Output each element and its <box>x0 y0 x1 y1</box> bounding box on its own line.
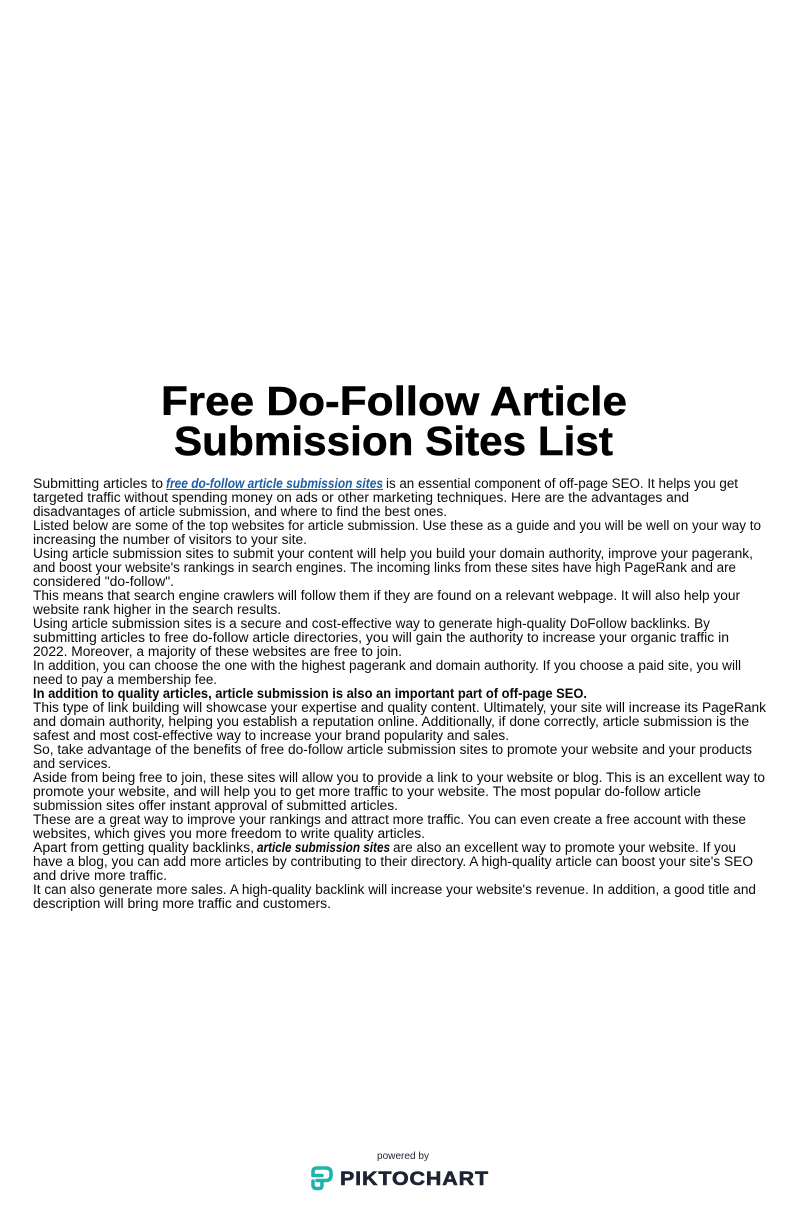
paragraph: more sales: It can also generate more sales. A high-quality backlink will increase your website's revenue. In addition, a good title and <box>33 882 756 898</box>
paragraph: introduction: targeted traffic without spending money on ads or other marketing techniques. Here are the advantages and <box>33 490 689 506</box>
paragraph: promoting your website: are also an excellent way to promote your website. If you <box>393 840 736 856</box>
paragraph: crawlers: website rank higher in the search results. <box>32 602 281 618</box>
body text <box>32 476 767 912</box>
paragraph: domain authority: Using article submission sites to submit your content will help you build your domain authority, improve your pagerank, <box>33 546 753 562</box>
icon: Piktochart logo <box>313 1168 331 1188</box>
paragraph: take advantage: So, take advantage of the benefits of free do-follow article submission sites to promote your website and your products <box>33 742 752 758</box>
paragraph: introduction <box>33 476 738 520</box>
paragraph: domain authority: and boost your website's rankings in search engines. The incoming links from these sites have high PageRank and are <box>33 560 736 576</box>
paragraph: introduction: disadvantages of article submission, and where to find the best ones. <box>33 504 447 520</box>
paragraph: backlinks: submitting articles to free do-follow article directories, you will gain the authority to increase your organic traffic in <box>33 630 729 646</box>
paragraph: choosing a site <box>33 658 741 688</box>
paragraph: introduction: is an essential component of off-page SEO. It helps you get <box>386 476 738 492</box>
paragraph: crawlers <box>32 588 740 618</box>
paragraph: rankings <box>32 812 746 842</box>
paragraph: backlinks: 2022. Moreover, a majority of these websites are free to join. <box>33 644 402 660</box>
link: free do-follow article submission sites: free do-follow article submission sites <box>166 476 383 492</box>
paragraph: promoting your website: have a blog, you can add more articles by contributing to their directory. A high-quality article can boost your site's SEO <box>33 854 753 870</box>
paragraph: more sales <box>33 882 756 912</box>
paragraph: introduction: Submitting articles to <box>33 476 163 492</box>
paragraph: backlinks <box>33 616 729 660</box>
paragraph: promoting your website: and drive more traffic. <box>33 868 167 884</box>
paragraph: top websites: increasing the number of visitors to your site. <box>33 532 307 548</box>
title: Free Do-Follow Article <box>161 378 627 424</box>
title: Submission Sites List <box>174 418 613 464</box>
paragraph: bold statement: In addition to quality articles, article submission is also an important part of off-page SEO. <box>33 686 587 702</box>
paragraph: promoting your website: article submission sites <box>257 840 390 856</box>
paragraph: backlinks: Using article submission sites is a secure and cost-effective way to generate high-quality DoFollow backlinks. By <box>33 616 711 632</box>
paragraph: free to join: Aside from being free to join, these sites will allow you to provide a link to your website or blog. This is an excellent way to <box>33 770 765 786</box>
paragraph: free to join: promote your website, and will help you to get more traffic to your website. The most popular do-follow article <box>33 784 701 800</box>
paragraph: choosing a site: In addition, you can choose the one with the highest pagerank and domain authority. If you choose a paid site, you will <box>33 658 741 674</box>
footer: powered by Piktochart <box>313 1150 489 1190</box>
paragraph: free to join <box>33 770 765 814</box>
paragraph: domain authority: considered "do-follow". <box>33 574 174 590</box>
paragraph: domain authority <box>33 546 753 590</box>
wordmark: Piktochart: PIKTOCHART <box>340 1168 489 1190</box>
paragraph: top websites <box>33 518 761 548</box>
paragraph: link building: and domain authority, helping you establish a reputation online. Additionally, if done correctly, article submission is the <box>33 714 749 730</box>
paragraph: rankings: websites, which gives you more freedom to write quality articles. <box>32 826 425 842</box>
paragraph: take advantage: and services. <box>33 756 111 772</box>
paragraph: promoting your website: Apart from getting quality backlinks, <box>33 840 254 856</box>
powered by label: powered by <box>377 1150 430 1162</box>
paragraph: rankings: These are a great way to improve your rankings and attract more traffic. You can even create a free account with these <box>33 812 746 828</box>
paragraph: choosing a site: need to pay a membership fee. <box>33 672 217 688</box>
paragraph: promoting your website <box>33 840 753 884</box>
paragraph: more sales: description will bring more traffic and customers. <box>33 896 331 912</box>
paragraph: crawlers: This means that search engine crawlers will follow them if they are found on a relevant webpage. It will also help your <box>33 588 740 604</box>
paragraph: link building <box>33 700 767 744</box>
paragraph: top websites: Listed below are some of the top websites for article submission. Use these as a guide and you will be well on your way to <box>33 518 761 534</box>
title <box>161 378 627 464</box>
paragraph: link building: This type of link building will showcase your expertise and quality content. Ultimately, your site will increase its PageRank <box>33 700 767 716</box>
paragraph: take advantage <box>33 742 752 772</box>
paragraph: free to join: submission sites offer instant approval of submitted articles. <box>33 798 398 814</box>
paragraph: link building: safest and most cost-effective way to increase your brand popularity and sales. <box>33 728 509 744</box>
